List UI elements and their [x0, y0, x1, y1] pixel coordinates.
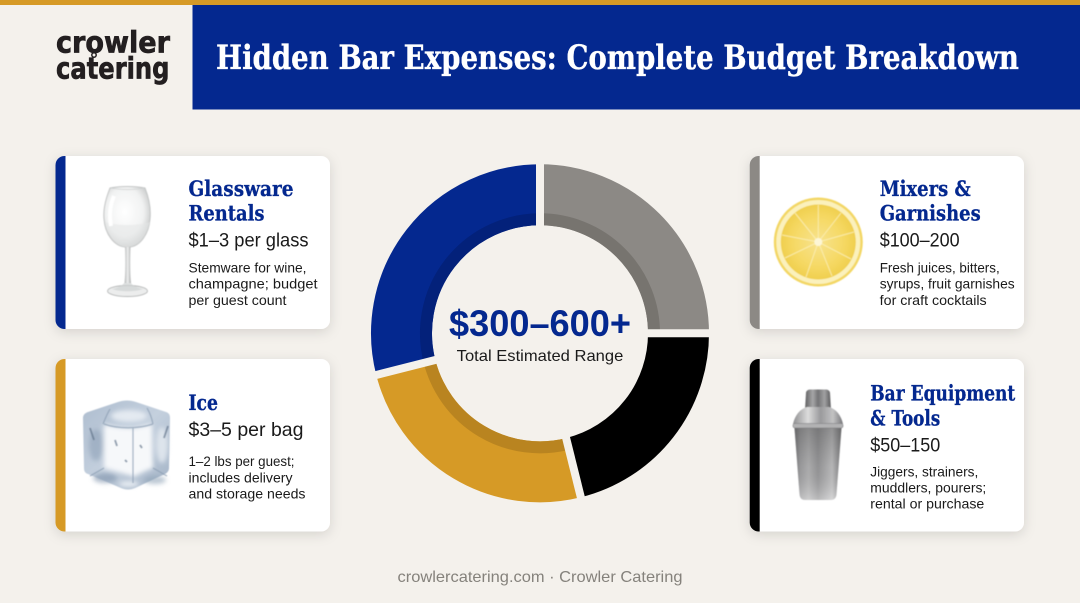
footer: crowlercatering.com · Crowler Catering [398, 569, 682, 586]
heading: mixers and garnishes: Garnishes [880, 201, 981, 226]
logo: crowler catering [56, 26, 171, 86]
description: muddlers, pourers; [870, 480, 986, 496]
description: syrups, fruit garnishes [880, 276, 1015, 292]
center total [449, 303, 631, 365]
price: $50–150 [870, 434, 940, 456]
description: Jiggers, strainers, [870, 464, 978, 480]
description: and storage needs [188, 486, 306, 502]
panel: bar equipment and tools [750, 359, 1024, 532]
header banner [192, 5, 1080, 110]
description: includes delivery [188, 470, 292, 486]
heading: glassware rentals: Glassware [188, 176, 294, 201]
icon: lemon slice [774, 198, 863, 286]
description [188, 260, 318, 308]
heading: glassware rentals [188, 176, 294, 226]
icon: ice cube [83, 400, 170, 490]
panel: ice [56, 359, 330, 532]
total amount: $300–600+ [449, 303, 631, 344]
heading: bar equipment and tools [870, 381, 1016, 430]
icon: wine glass [104, 186, 150, 296]
description: 1–2 lbs per guest; [188, 453, 294, 469]
description [870, 464, 986, 512]
heading: bar equipment and tools: & Tools [870, 405, 940, 430]
top gold band [0, 0, 1080, 5]
price: $1–3 per glass [188, 230, 309, 252]
panel: glassware rentals [56, 156, 330, 329]
donut chart [370, 158, 715, 503]
segment: glassware blue [402, 195, 540, 368]
segment: equipment black [574, 333, 678, 468]
description: per guest count [188, 292, 287, 308]
description [188, 453, 306, 502]
heading: mixers and garnishes: Mixers & [880, 176, 971, 201]
heading: mixers and garnishes [880, 176, 981, 226]
description: for craft cocktails [880, 292, 987, 308]
description [880, 260, 1015, 308]
heading: ice: Ice [188, 390, 218, 415]
segment: ice gold [406, 362, 574, 472]
total label: Total Estimated Range [457, 348, 623, 365]
heading: glassware rentals: Rentals [188, 201, 264, 226]
price: $100–200 [880, 230, 960, 252]
description: Stemware for wine, [188, 260, 306, 276]
description: champagne; budget [188, 276, 318, 292]
icon: cocktail shaker [793, 390, 843, 500]
logo: crowler catering: catering [56, 52, 170, 86]
price: $3–5 per bag [188, 419, 304, 441]
heading: bar equipment and tools: Bar Equipment [870, 381, 1016, 406]
logo: crowler catering: crowler [56, 26, 171, 60]
description: rental or purchase [870, 496, 985, 512]
panel: mixers and garnishes [750, 156, 1024, 329]
segment: mixers gray [540, 195, 678, 333]
description: Fresh juices, bitters, [880, 260, 1000, 276]
